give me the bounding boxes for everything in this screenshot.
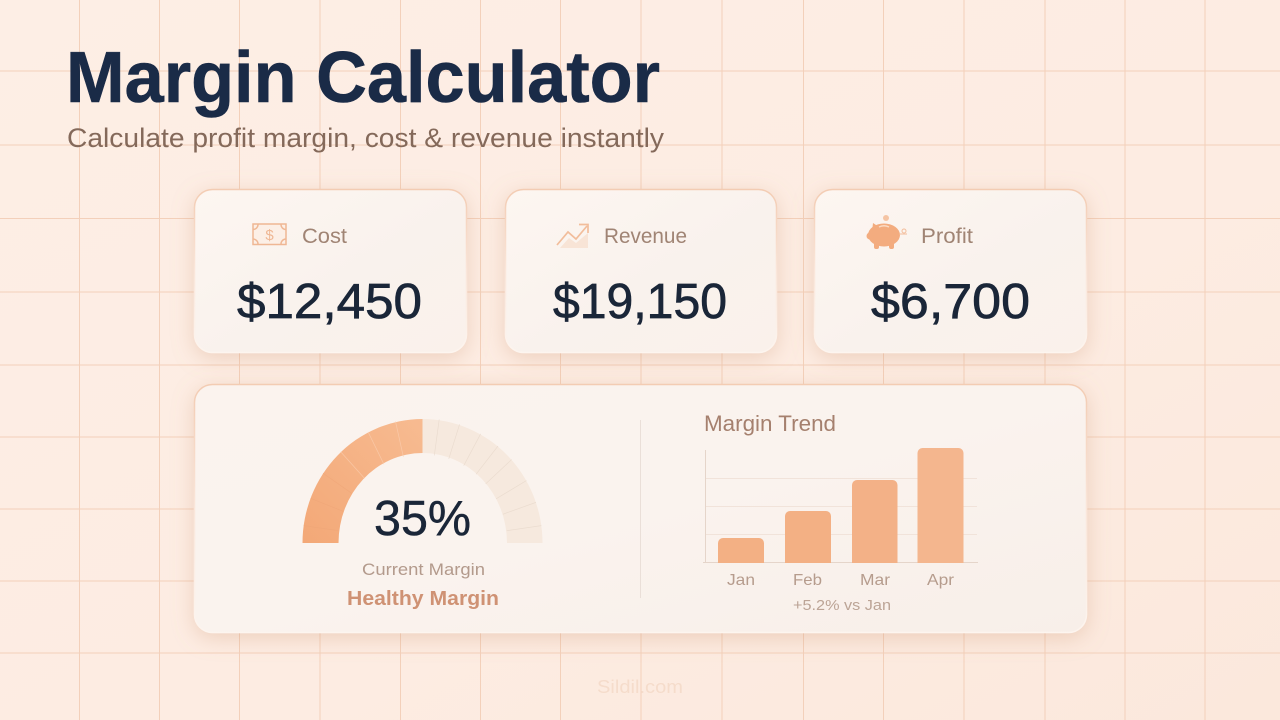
value: cost: $12,450 (237, 275, 422, 329)
chart heading: Margin Trend (704, 411, 836, 436)
card: profit (814, 190, 1086, 352)
gauge caption: Current Margin (362, 560, 485, 579)
title: Margin Calculator (66, 38, 660, 118)
gauge (302, 419, 542, 543)
label: cost: Cost (302, 225, 347, 248)
gauge remaining arc (422, 419, 542, 543)
axis labels: Jan (727, 572, 755, 589)
axis labels: Feb (793, 572, 822, 589)
panel divider (640, 420, 642, 598)
icon: trend chart (557, 224, 588, 248)
bar chart (703, 448, 978, 589)
subtitle: Calculate profit margin, cost & revenue instantly (67, 123, 665, 153)
bar: Jan (718, 538, 764, 563)
axis labels: Apr (927, 572, 955, 589)
gauge value: 35% (374, 492, 471, 546)
footer brand: Sildil.com (597, 677, 683, 697)
bar: Apr (918, 448, 964, 563)
gauge status: Healthy Margin (347, 588, 499, 610)
axis labels: Mar (860, 572, 891, 589)
value: revenue: $19,150 (553, 275, 727, 329)
label: profit: Profit (921, 225, 973, 248)
icon: banknote: $ (265, 227, 274, 244)
chart note: +5.2% vs Jan (793, 597, 891, 614)
card: revenue (506, 190, 776, 352)
icon: banknote (253, 224, 286, 244)
card: cost (194, 190, 466, 352)
axis labels (727, 572, 955, 589)
panel: margin details (194, 384, 1086, 632)
icon: piggy bank (866, 215, 907, 249)
gauge filled arc (302, 419, 422, 543)
label: revenue: Revenue (604, 225, 687, 248)
bar: Feb (785, 511, 831, 563)
value: profit: $6,700 (871, 275, 1030, 329)
bar: Mar (852, 480, 898, 563)
